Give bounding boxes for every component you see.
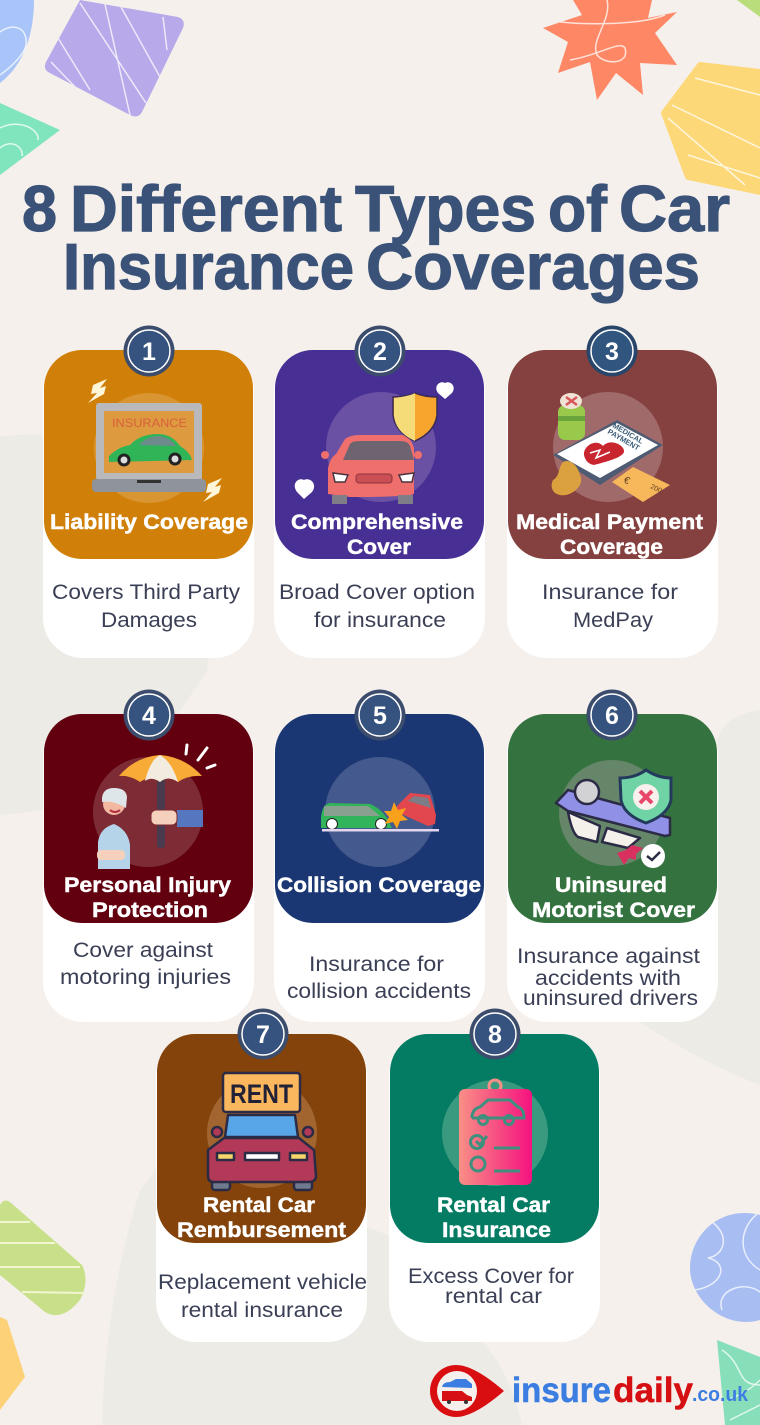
panel: card 3 medical payment coverage — [507, 326, 718, 658]
description: motoring injuries — [60, 966, 231, 989]
number badge 1 — [124, 326, 174, 376]
title: Different — [70, 172, 342, 245]
number badge 6: 6 — [605, 702, 619, 730]
decorative shape: blue top left — [0, 0, 34, 83]
card 5 header — [275, 714, 484, 923]
heading — [177, 1194, 346, 1242]
decorative shape: yellow corner — [0, 1317, 25, 1410]
description: Broad Cover option — [279, 581, 475, 604]
title — [22, 172, 730, 303]
number badge 8: 8 — [488, 1021, 502, 1049]
description: for insurance — [314, 609, 446, 632]
title: Types — [355, 172, 536, 245]
heading: Rental Car — [437, 1194, 550, 1217]
heading: Rental Car — [203, 1194, 315, 1217]
description: Cover against — [73, 939, 213, 962]
heading: Cover — [347, 536, 411, 559]
card 7 header — [157, 1034, 366, 1243]
panel: card 6 uninsured motorist cover — [507, 690, 718, 1022]
heading: Insurance — [442, 1219, 551, 1242]
icon: medical payment phone: PAYMENT — [606, 427, 642, 453]
icon: laptop with car — [88, 379, 222, 503]
heading: Coverage — [560, 536, 663, 559]
title: Car — [619, 172, 730, 245]
icon: laptop with car: INSURANCE — [112, 416, 187, 430]
decorative shape: green bottom right — [717, 1340, 760, 1425]
panel: card 2 comprehensive cover — [274, 326, 485, 658]
number badge 3: 3 — [605, 338, 619, 366]
decorative shape: green corner — [737, 0, 760, 17]
description: Insurance for — [309, 953, 444, 976]
icon: car collision — [321, 757, 439, 867]
number badge 4: 4 — [142, 702, 156, 730]
icon: medical payment phone: MEDICAL — [611, 421, 645, 446]
wordmark: .co.uk — [692, 1384, 749, 1406]
heading: Protection — [92, 899, 208, 922]
number badge 7: 7 — [256, 1021, 270, 1049]
icon: rental car — [207, 1073, 317, 1190]
heading: Liability Coverage — [50, 511, 248, 534]
logo: insuredaily.co.uk — [430, 1365, 749, 1417]
icon: car with shield — [295, 382, 454, 504]
description: rental insurance — [181, 1299, 343, 1322]
heading: Personal Injury — [64, 874, 231, 897]
heading — [437, 1194, 551, 1242]
description: accidents with — [535, 967, 681, 990]
icon: red location pointer with vehicles — [430, 1365, 504, 1417]
icon: clipboard checklist — [442, 1080, 548, 1186]
panel: card 4 personal injury protection — [43, 690, 254, 1022]
decorative shape: orange star — [543, 0, 677, 100]
heading: Collision Coverage — [277, 874, 481, 897]
heading: Medical Payment — [516, 511, 703, 534]
icon: overturned car with shield — [556, 760, 671, 868]
number badge 2 — [354, 326, 406, 376]
number badge 2: 2 — [373, 338, 387, 366]
card 3 header — [508, 350, 717, 559]
heading — [291, 511, 463, 559]
title: 8 — [22, 172, 57, 245]
wordmark: insure — [512, 1371, 611, 1410]
card 1 header — [44, 350, 253, 559]
description: Damages — [101, 609, 197, 632]
description — [287, 953, 471, 1003]
description — [279, 581, 475, 632]
title: Coverages — [366, 230, 700, 303]
description — [52, 581, 241, 632]
description — [408, 1265, 574, 1308]
card 6 header — [508, 714, 717, 923]
number badge 5: 5 — [373, 702, 387, 730]
decorative shape: yellow hexagon — [664, 65, 760, 192]
icon: medical payment phone: 200 — [649, 484, 663, 495]
description — [158, 1271, 367, 1322]
description: MedPay — [573, 609, 654, 632]
heading: Comprehensive — [291, 511, 463, 534]
title: Insurance — [63, 230, 354, 303]
description — [517, 945, 700, 1010]
panel: card 8 rental car insurance — [389, 1008, 600, 1342]
description: Replacement vehicle — [158, 1271, 367, 1294]
icon: rental car: RENT — [230, 1079, 293, 1109]
heading: Motorist Cover — [532, 899, 695, 922]
number badge 1: 1 — [142, 338, 156, 366]
description: rental car — [445, 1285, 542, 1308]
decorative shape: purple diamond — [45, 0, 184, 116]
decorative shape: green top left — [0, 103, 60, 175]
icon: medical payment phone — [552, 392, 670, 502]
heading: Rembursement — [177, 1219, 346, 1242]
icon: injured person with umbrella — [93, 745, 215, 869]
number badge 7 — [238, 1008, 288, 1060]
title: of — [548, 172, 607, 245]
description: uninsured drivers — [523, 987, 698, 1010]
description: Excess Cover for — [408, 1265, 574, 1288]
number badge 3 — [586, 326, 638, 376]
panel: card 5 collision coverage — [274, 690, 485, 1022]
number badge 6 — [586, 690, 638, 740]
description: Insurance for — [542, 581, 678, 604]
decorative shape: green pill — [0, 1201, 86, 1315]
description: Covers Third Party — [52, 581, 241, 604]
heading — [516, 511, 703, 559]
card 8 header — [390, 1034, 599, 1243]
heading — [64, 874, 231, 922]
description — [542, 581, 678, 632]
description: Insurance against — [517, 945, 700, 968]
card 2 header — [275, 350, 484, 559]
card 4 header — [44, 714, 253, 923]
description: collision accidents — [287, 980, 471, 1003]
wordmark: daily — [613, 1371, 694, 1410]
panel: card 1 liability coverage — [43, 326, 254, 658]
heading: Uninsured — [555, 874, 667, 897]
number badge 4 — [124, 690, 174, 740]
decorative shape: blue circle — [690, 1212, 760, 1322]
wordmark — [512, 1371, 749, 1410]
icon: medical payment phone: € — [622, 475, 632, 487]
heading — [532, 874, 695, 922]
panel: card 7 rental car reimbursement — [156, 1008, 367, 1342]
number badge 8 — [470, 1008, 520, 1060]
number badge 5 — [354, 690, 406, 740]
description — [60, 939, 231, 989]
